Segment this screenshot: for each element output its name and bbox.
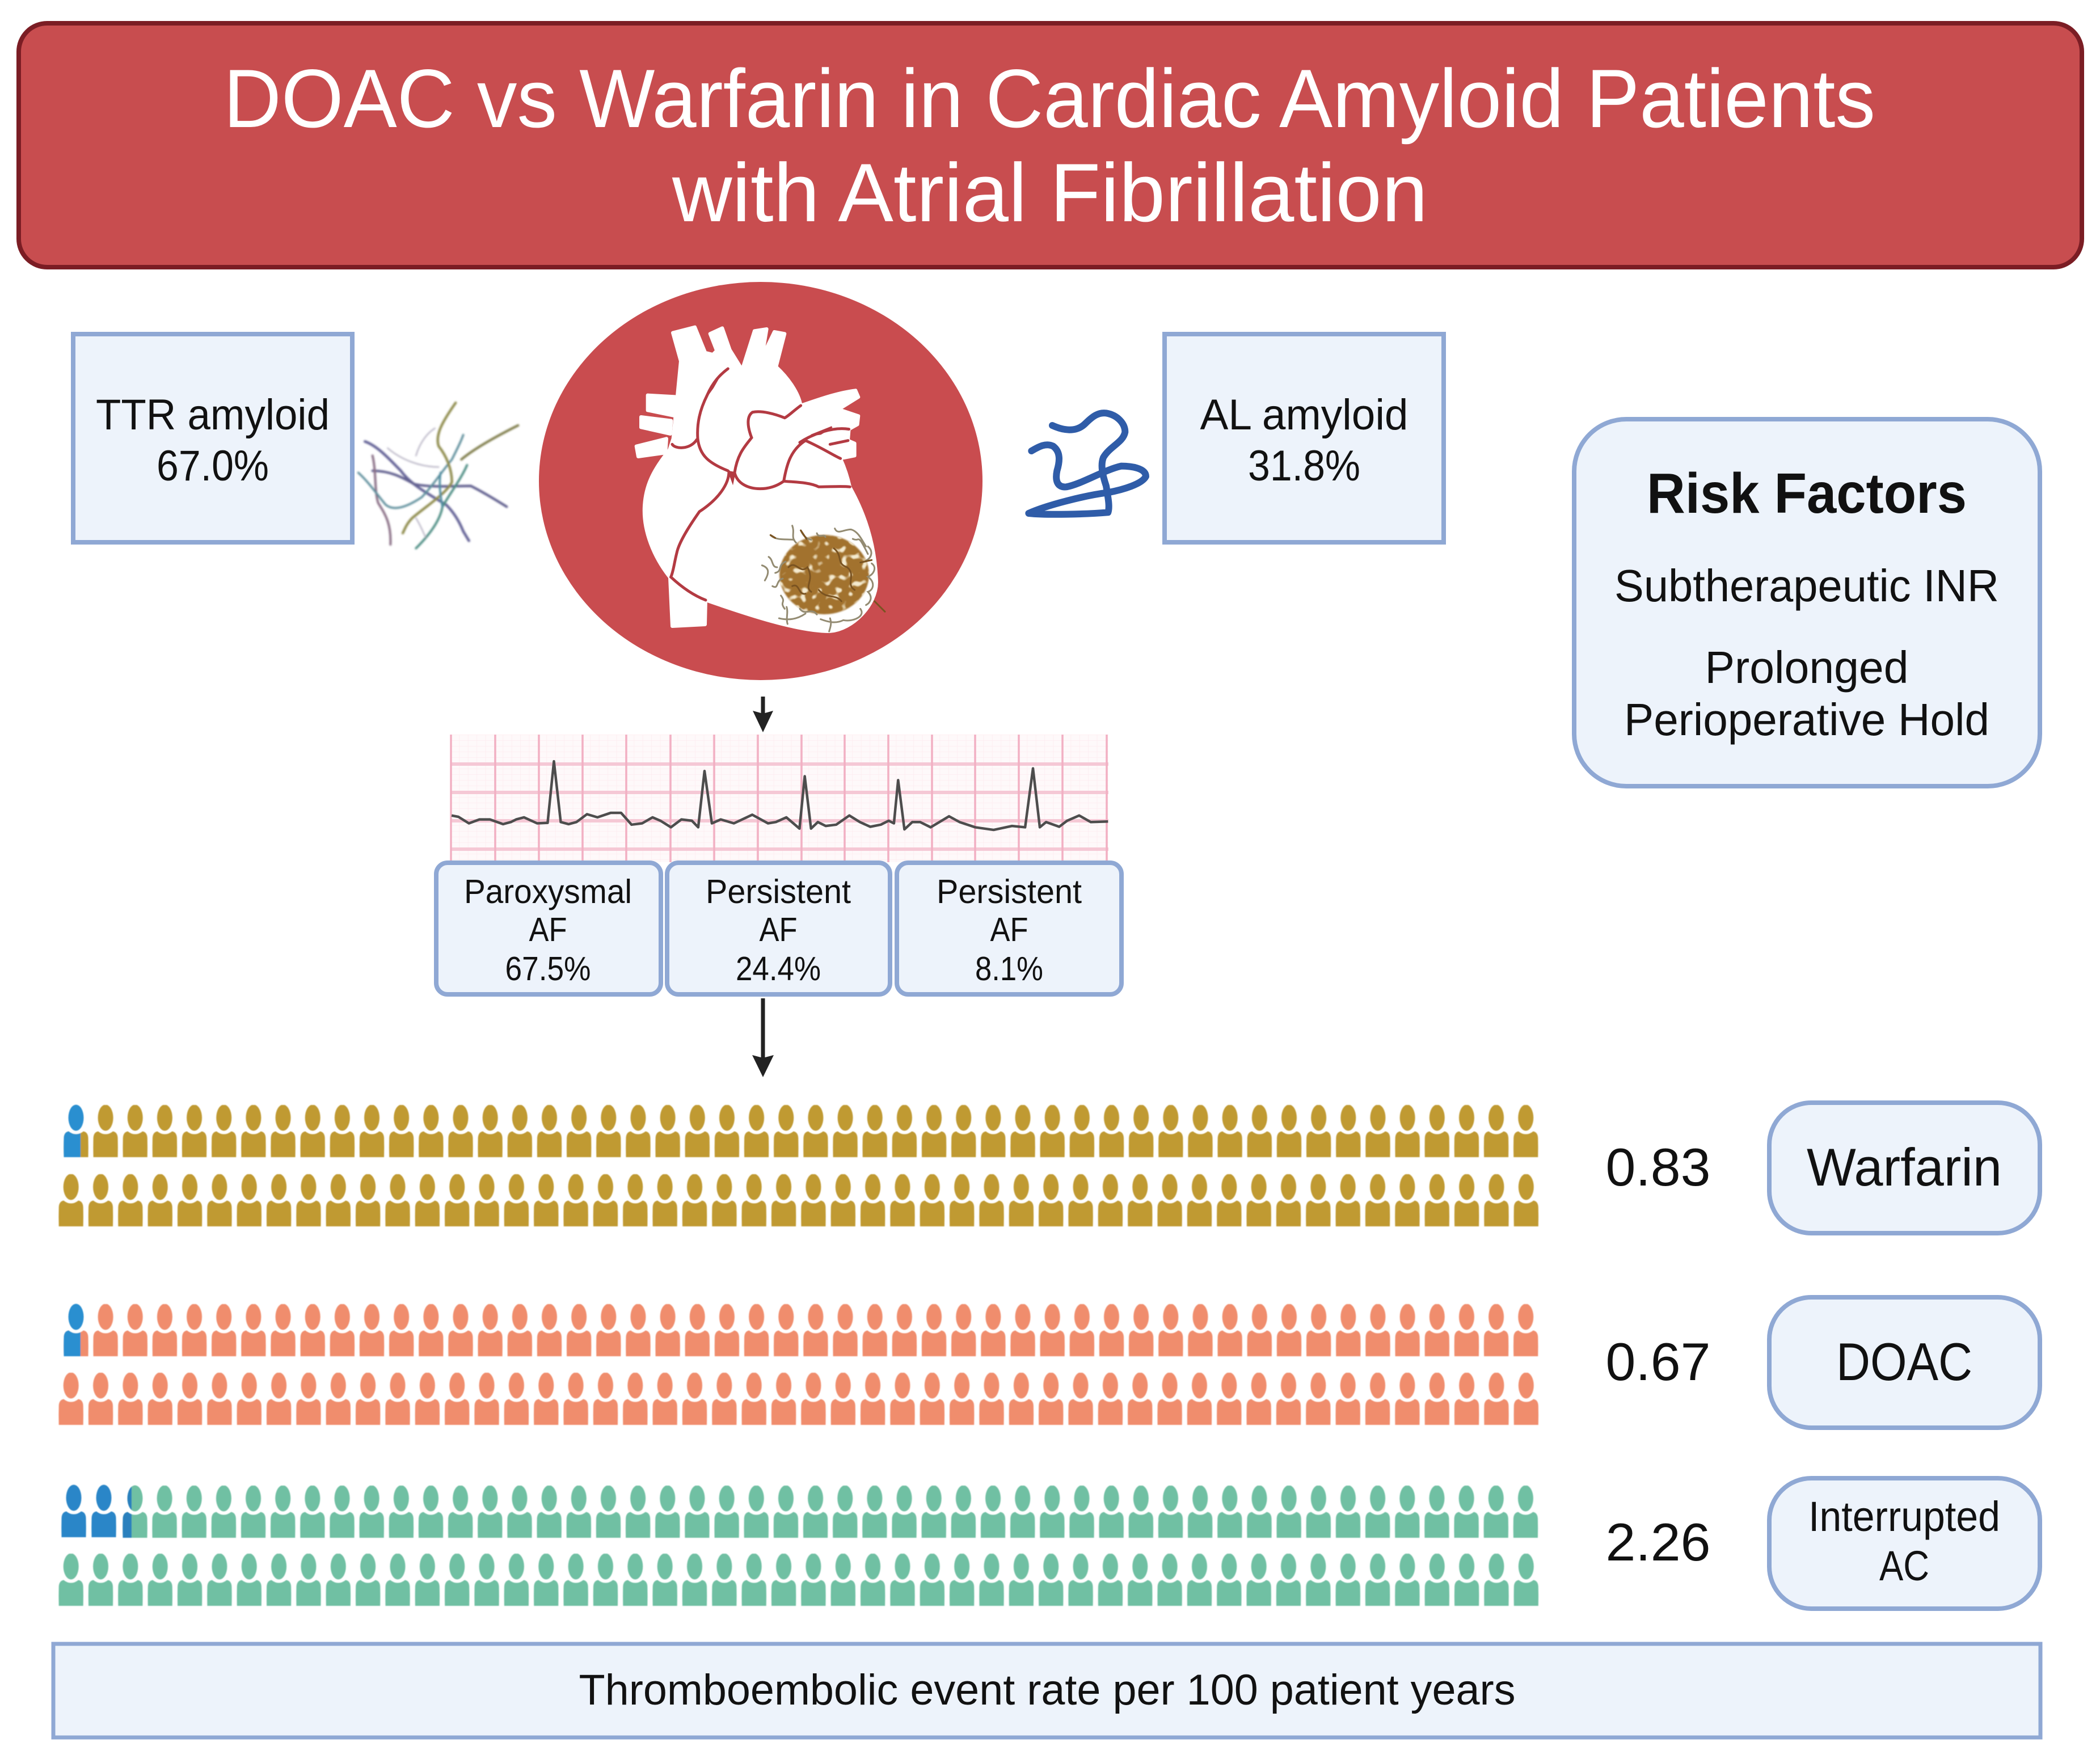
panel: paroxysmal AF: 67.5%	[505, 950, 591, 988]
panel: persistent AF 8.1%	[897, 863, 1121, 994]
arrow: AF types to patient rows	[752, 998, 774, 1077]
panel: paroxysmal AF	[436, 863, 661, 994]
panel: paroxysmal AF: AF	[529, 911, 567, 948]
label: warfarin	[1769, 1103, 2040, 1233]
panel: AL amyloid	[1165, 334, 1444, 542]
red circle	[539, 282, 982, 680]
panel: TTR amyloid: TTR amyloid	[96, 391, 330, 439]
icon: heart with amyloid	[539, 282, 982, 680]
risk factors list: Subtherapeutic INR	[1614, 560, 1999, 611]
title banner	[19, 23, 2082, 267]
panel: risk factors	[1574, 419, 2040, 786]
number: warfarin rate: 0.83	[1605, 1137, 1711, 1197]
chart: DOAC patient icons	[56, 1304, 1541, 1427]
caption: thromboembolic event rate	[53, 1644, 2040, 1737]
label: interrupted AC: AC	[1879, 1542, 1929, 1589]
risk factors list: Perioperative Hold	[1624, 694, 1989, 745]
panel: paroxysmal AF: Paroxysmal	[464, 873, 632, 910]
label: warfarin: Warfarin	[1807, 1137, 2002, 1197]
title text: with Atrial Fibrillation	[672, 146, 1428, 239]
panel: persistent AF 8.1%: AF	[990, 911, 1028, 948]
heart outline	[636, 327, 876, 631]
panel: AL amyloid: AL amyloid	[1200, 391, 1408, 439]
number: interrupted AC rate: 2.26	[1605, 1512, 1711, 1572]
caption: thromboembolic event rate: Thromboembolic event rate per 100 patient years	[579, 1666, 1516, 1714]
panel: persistent AF 8.1%: Persistent	[937, 873, 1082, 910]
panel: persistent AF 8.1%: 8.1%	[975, 950, 1043, 988]
panel: persistent AF 24.4%	[667, 863, 890, 994]
panel: persistent AF 24.4%: Persistent	[706, 873, 851, 910]
chart: interrupted AC patient icons	[56, 1485, 1541, 1608]
chart: ECG strip	[450, 735, 1108, 862]
label: DOAC	[1769, 1297, 2040, 1428]
title text	[224, 52, 1875, 239]
chart: warfarin patient icons	[56, 1105, 1541, 1228]
label: DOAC: DOAC	[1836, 1332, 1972, 1391]
label: interrupted AC: Interrupted	[1808, 1493, 2000, 1540]
label: interrupted AC	[1769, 1478, 2040, 1609]
icon: AL amyloid ribbon	[1028, 413, 1146, 514]
title text: DOAC vs Warfarin in Cardiac Amyloid Patients	[224, 52, 1875, 145]
amyloid tangle	[762, 526, 885, 631]
risk factors heading: Risk Factors	[1647, 462, 1967, 525]
panel: TTR amyloid: 67.0%	[157, 442, 269, 490]
number: DOAC rate: 0.67	[1605, 1332, 1711, 1391]
panel: persistent AF 24.4%: AF	[759, 911, 798, 948]
icon: TTR fibrils	[359, 403, 518, 549]
panel: persistent AF 24.4%: 24.4%	[736, 950, 821, 988]
panel: TTR amyloid	[73, 334, 352, 542]
panel: AL amyloid: 31.8%	[1248, 442, 1360, 490]
arrow: heart to ECG	[753, 697, 773, 732]
risk factors list: Prolonged	[1705, 642, 1908, 693]
risk factors list	[1614, 560, 1999, 745]
